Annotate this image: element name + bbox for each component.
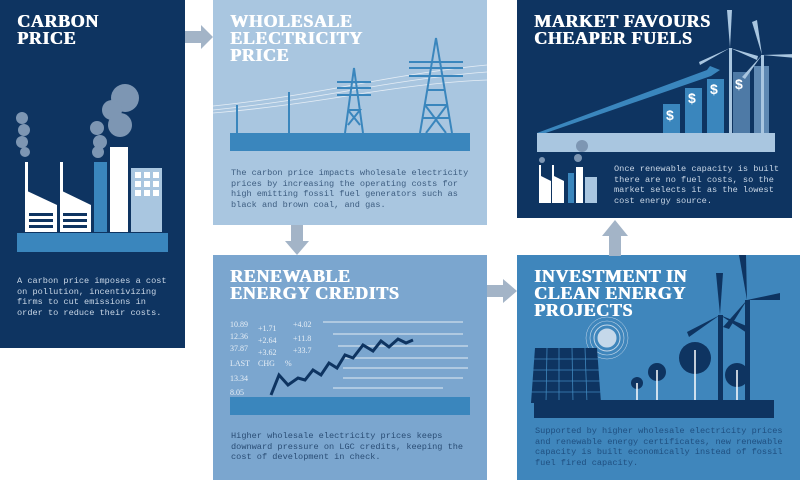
arrow: investment to market [602,220,628,256]
heading: market favours cheaper fuels: CHEAPER FUELS [534,28,692,48]
chart: stock ticker: 8.05 [230,388,244,397]
panel: wholesale electricity price [213,0,487,225]
chart: stock ticker [230,320,470,415]
chart: stock ticker: LAST [230,359,250,368]
panel: market favours cheaper fuels [517,0,792,218]
chart: stock ticker: CHG [258,359,275,368]
text: carbon price description: A carbon price imposes a cost on pollution, incentivizing firms to cut emissions in order to reduce their costs. [17,276,167,318]
text: market description: Once renewable capacity is built there are no fuel costs, so the market selects it as the lowest cost energy source. [614,164,779,206]
chart: stock ticker: +2.64 [258,336,277,345]
text: credits description: Higher wholesale electricity prices keeps downward pressure on LGC credits, keeping the cost of development in check. [231,431,463,462]
heading: carbon price: PRICE [17,28,76,48]
chart: stock ticker: % [285,359,292,368]
heading: market favours cheaper fuels [534,11,711,48]
icon: solar, trees, wind turbines [531,255,780,418]
chart: stock ticker: 12.36 [230,332,248,341]
chart: stock ticker: +4.02 [293,320,312,329]
icon: factory [16,84,168,252]
chart: rising bars with dollar signs and turbines: $ [735,76,743,92]
heading: wholesale electricity price: PRICE [230,45,289,65]
chart: rising bars with dollar signs and turbines: $ [666,107,674,123]
heading: carbon price [17,11,99,48]
chart: rising bars with dollar signs and turbines [537,10,792,203]
heading: renewable energy credits [230,266,399,303]
chart: stock ticker: +3.62 [258,348,277,357]
heading: renewable energy credits: RENEWABLE [230,266,350,286]
chart: stock ticker: 13.34 [230,374,248,383]
chart: stock ticker: 10.89 [230,320,248,329]
chart: stock ticker: +33.7 [293,346,312,355]
panel: investment in clean energy projects [517,255,800,480]
text: wholesale description: The carbon price impacts wholesale electricity prices by increasing the operating costs for high emitting fossil fuel generators such as black and brown coal, and gas. [231,168,468,210]
heading: investment in clean energy projects: PROJECTS [534,300,633,320]
heading: wholesale electricity price: WHOLESALE [230,11,352,31]
panel: carbon price [0,0,185,348]
heading: wholesale electricity price [230,11,363,65]
chart: stock ticker: +11.8 [293,334,311,343]
arrow: carbon to wholesale [185,25,213,49]
heading: investment in clean energy projects: CLEAN ENERGY [534,283,686,303]
heading: market favours cheaper fuels: MARKET FAVOURS [534,11,711,31]
chart: stock ticker: 37.87 [230,344,248,353]
chart: rising bars with dollar signs and turbines: $ [710,81,718,97]
icon: power lines [213,38,487,151]
arrow: credits to investment [487,279,517,303]
heading: carbon price: CARBON [17,11,99,31]
panel: renewable energy credits [213,255,487,480]
text: investment description: Supported by higher wholesale electricity prices and renewable energy certificates, new renewable capacity is built economically instead of fossil fuel fired capacity. [535,426,783,468]
heading: wholesale electricity price: ELECTRICITY [230,28,363,48]
heading: renewable energy credits: ENERGY CREDITS [230,283,399,303]
chart: stock ticker: +1.71 [258,324,277,333]
arrow: wholesale to renewable credits [285,225,309,255]
heading: investment in clean energy projects: INVESTMENT IN [534,266,687,286]
chart: rising bars with dollar signs and turbines: $ [688,90,696,106]
heading: investment in clean energy projects [534,266,687,320]
